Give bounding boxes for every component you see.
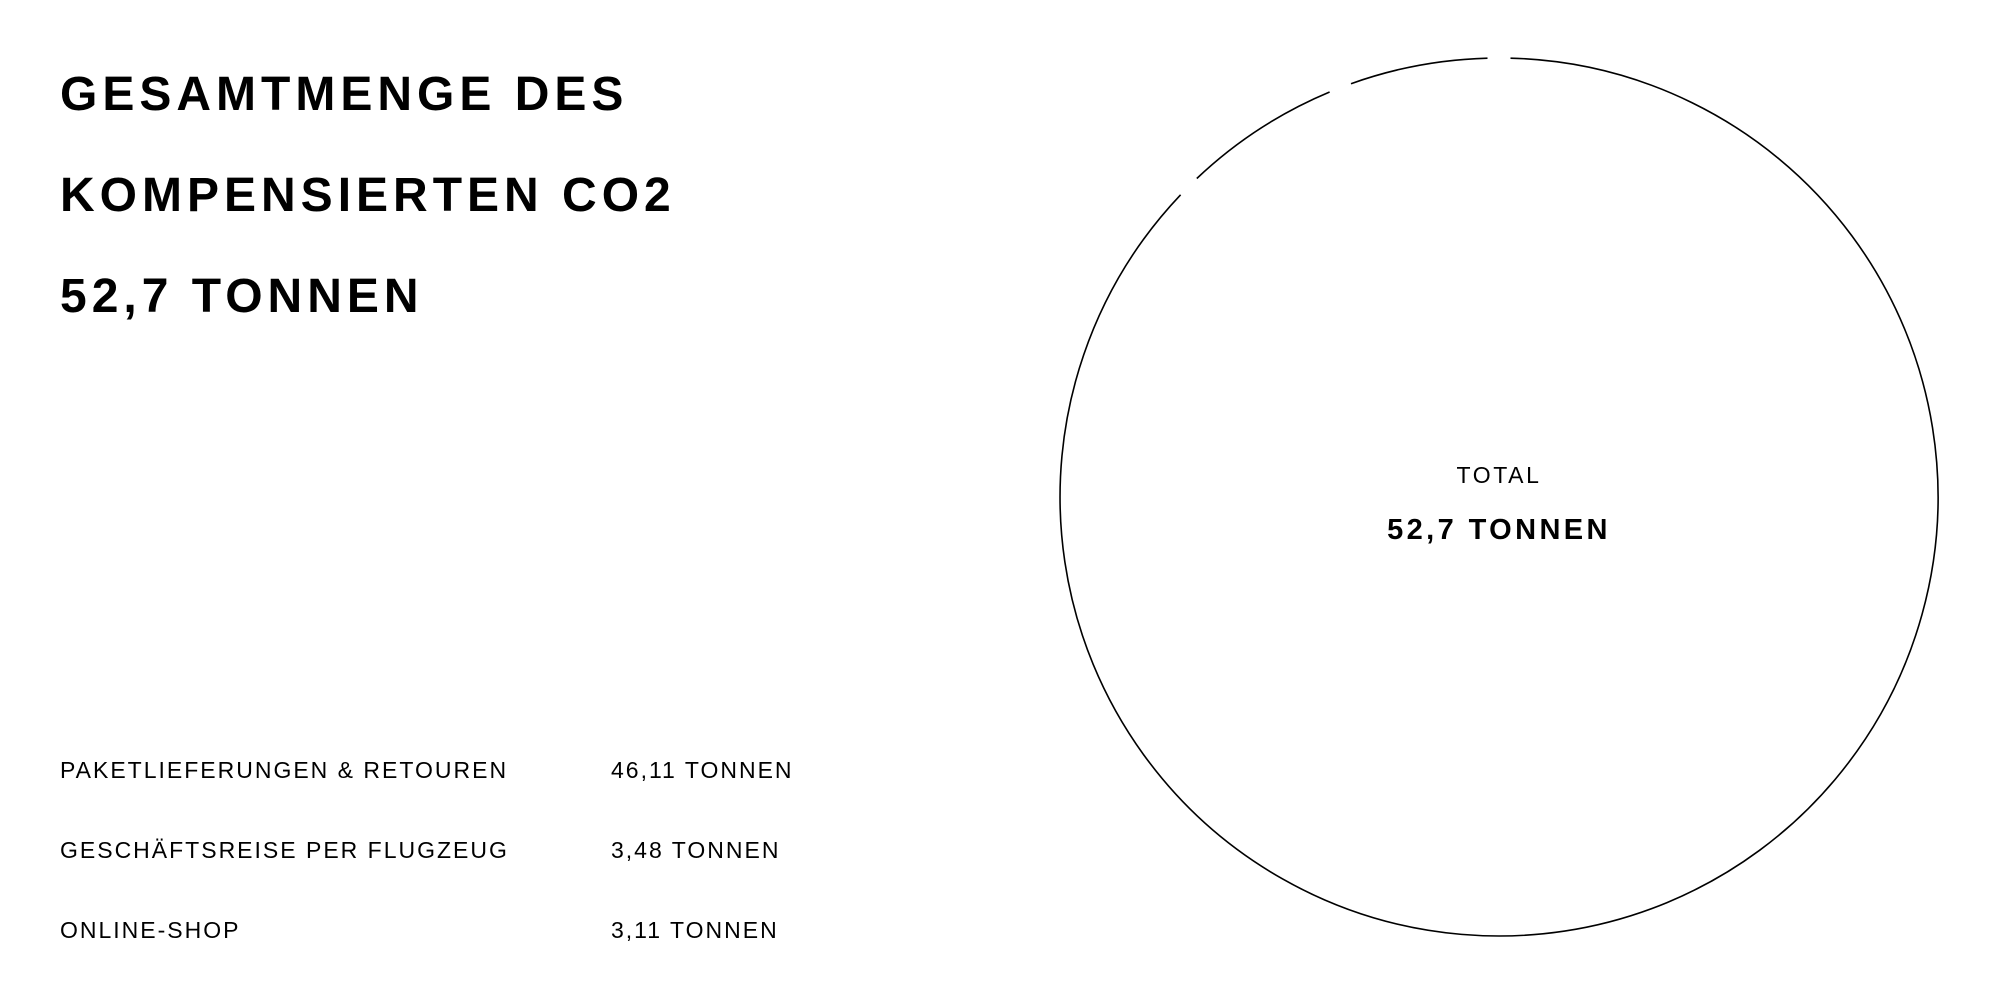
- title: KOMPENSIERTEN CO2: [60, 169, 676, 222]
- row: geschäftsreise: [60, 837, 780, 863]
- title: [60, 68, 676, 323]
- center label: [1387, 462, 1611, 546]
- row: online-shop: ONLINE-SHOP: [60, 917, 240, 943]
- legend list: 3,11 TONNEN: [611, 917, 779, 943]
- segment: geschäftsreise: [1197, 92, 1330, 178]
- legend list: [60, 757, 794, 943]
- title: 52,7 TONNEN: [60, 270, 424, 323]
- legend list: 3,48 TONNEN: [611, 837, 780, 863]
- center label: TOTAL: [1456, 462, 1542, 488]
- row: geschäftsreise: GESCHÄFTSREISE PER FLUGZEUG: [60, 837, 509, 863]
- segment: online-shop: [1351, 58, 1488, 84]
- row: online-shop: [60, 917, 779, 943]
- legend list: 46,11 TONNEN: [611, 757, 794, 783]
- row: paketlieferungen: PAKETLIEFERUNGEN & RETOUREN: [60, 757, 508, 783]
- row: paketlieferungen: [60, 757, 794, 783]
- segment: paketlieferungen: [1060, 58, 1938, 936]
- title: GESAMTMENGE DES: [60, 68, 628, 121]
- center label: 52,7 TONNEN: [1387, 514, 1611, 546]
